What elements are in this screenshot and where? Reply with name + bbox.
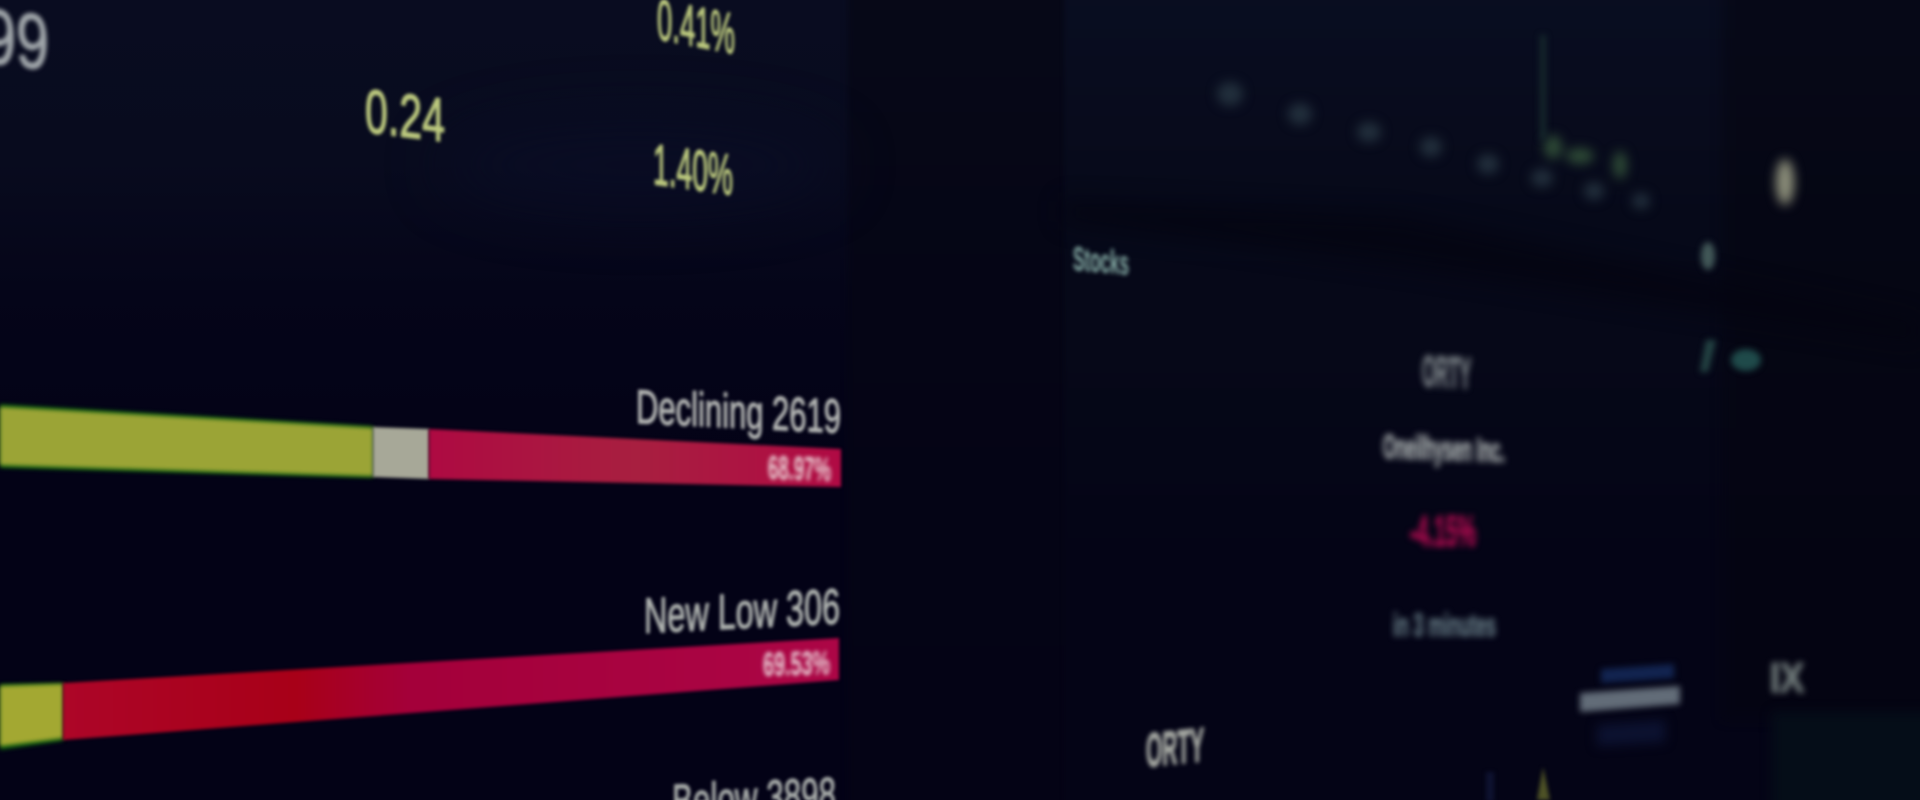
heading: Stocks: Stocks	[1073, 240, 1129, 283]
sparkline peaks	[1544, 135, 1627, 179]
number: 0.24: 0.24	[365, 77, 445, 156]
scene: blurred stock dashboard photograph: ORTY	[1422, 347, 1471, 399]
bar segment: new high fill	[0, 684, 63, 746]
chart: faint axis labels and sparkline, top right	[1217, 82, 1650, 209]
bar segment: advancing edge	[0, 404, 373, 478]
bar segment: unchanged	[373, 427, 429, 479]
candle spike: yellow red	[1537, 767, 1550, 800]
tooltip: faint detail row	[1597, 720, 1665, 746]
background: soft navy glow, left screen	[440, 120, 840, 210]
background: dark diagonal band between right panels	[1062, 200, 1920, 345]
label: Declining 2619: Declining 2619	[636, 381, 841, 444]
axis label blobs	[1217, 82, 1650, 209]
bar value: 68.97%: 68.97%	[768, 449, 831, 489]
candle: left faint bar	[1486, 772, 1494, 800]
bar: new low breadth	[0, 638, 839, 750]
bar segment: new low	[63, 638, 839, 740]
bar segment: new high edge	[0, 683, 63, 750]
icon: blurred marker	[1701, 242, 1715, 270]
background: lower right panel	[1772, 712, 1920, 800]
bar segment: declining	[429, 429, 841, 487]
scene: blurred stock dashboard photograph: -4.15%	[1410, 507, 1476, 556]
bar value: 69.53%: 69.53%	[763, 644, 830, 684]
chart: candle spike at bottom	[1486, 767, 1550, 800]
scene: blurred stock dashboard photograph: Oneilhysen Inc.	[1383, 428, 1505, 470]
label: IX: IX	[1770, 654, 1804, 701]
tooltip: light value row	[1580, 686, 1680, 712]
bar segment: advancing fill	[0, 407, 373, 476]
chart: sparkline spike	[1540, 35, 1546, 140]
caption: in 3 minutes: in 3 minutes	[1393, 607, 1496, 643]
label: blurred teal tag	[1731, 349, 1761, 371]
icon: edit pencil	[1700, 340, 1716, 372]
background: monitor bezel	[848, 0, 1088, 800]
scene: blurred stock dashboard photograph: 1.40%	[653, 132, 733, 208]
scene: blurred stock dashboard photograph: ORTY	[1146, 718, 1204, 778]
background: right screen	[1064, 0, 1920, 800]
bar: declining breadth	[0, 404, 841, 489]
background: right edge shading	[1722, 0, 1920, 720]
tooltip: blue header	[1601, 664, 1674, 683]
icon: bright blurred marker	[1776, 159, 1794, 205]
label: New Low 306: New Low 306	[644, 578, 840, 644]
